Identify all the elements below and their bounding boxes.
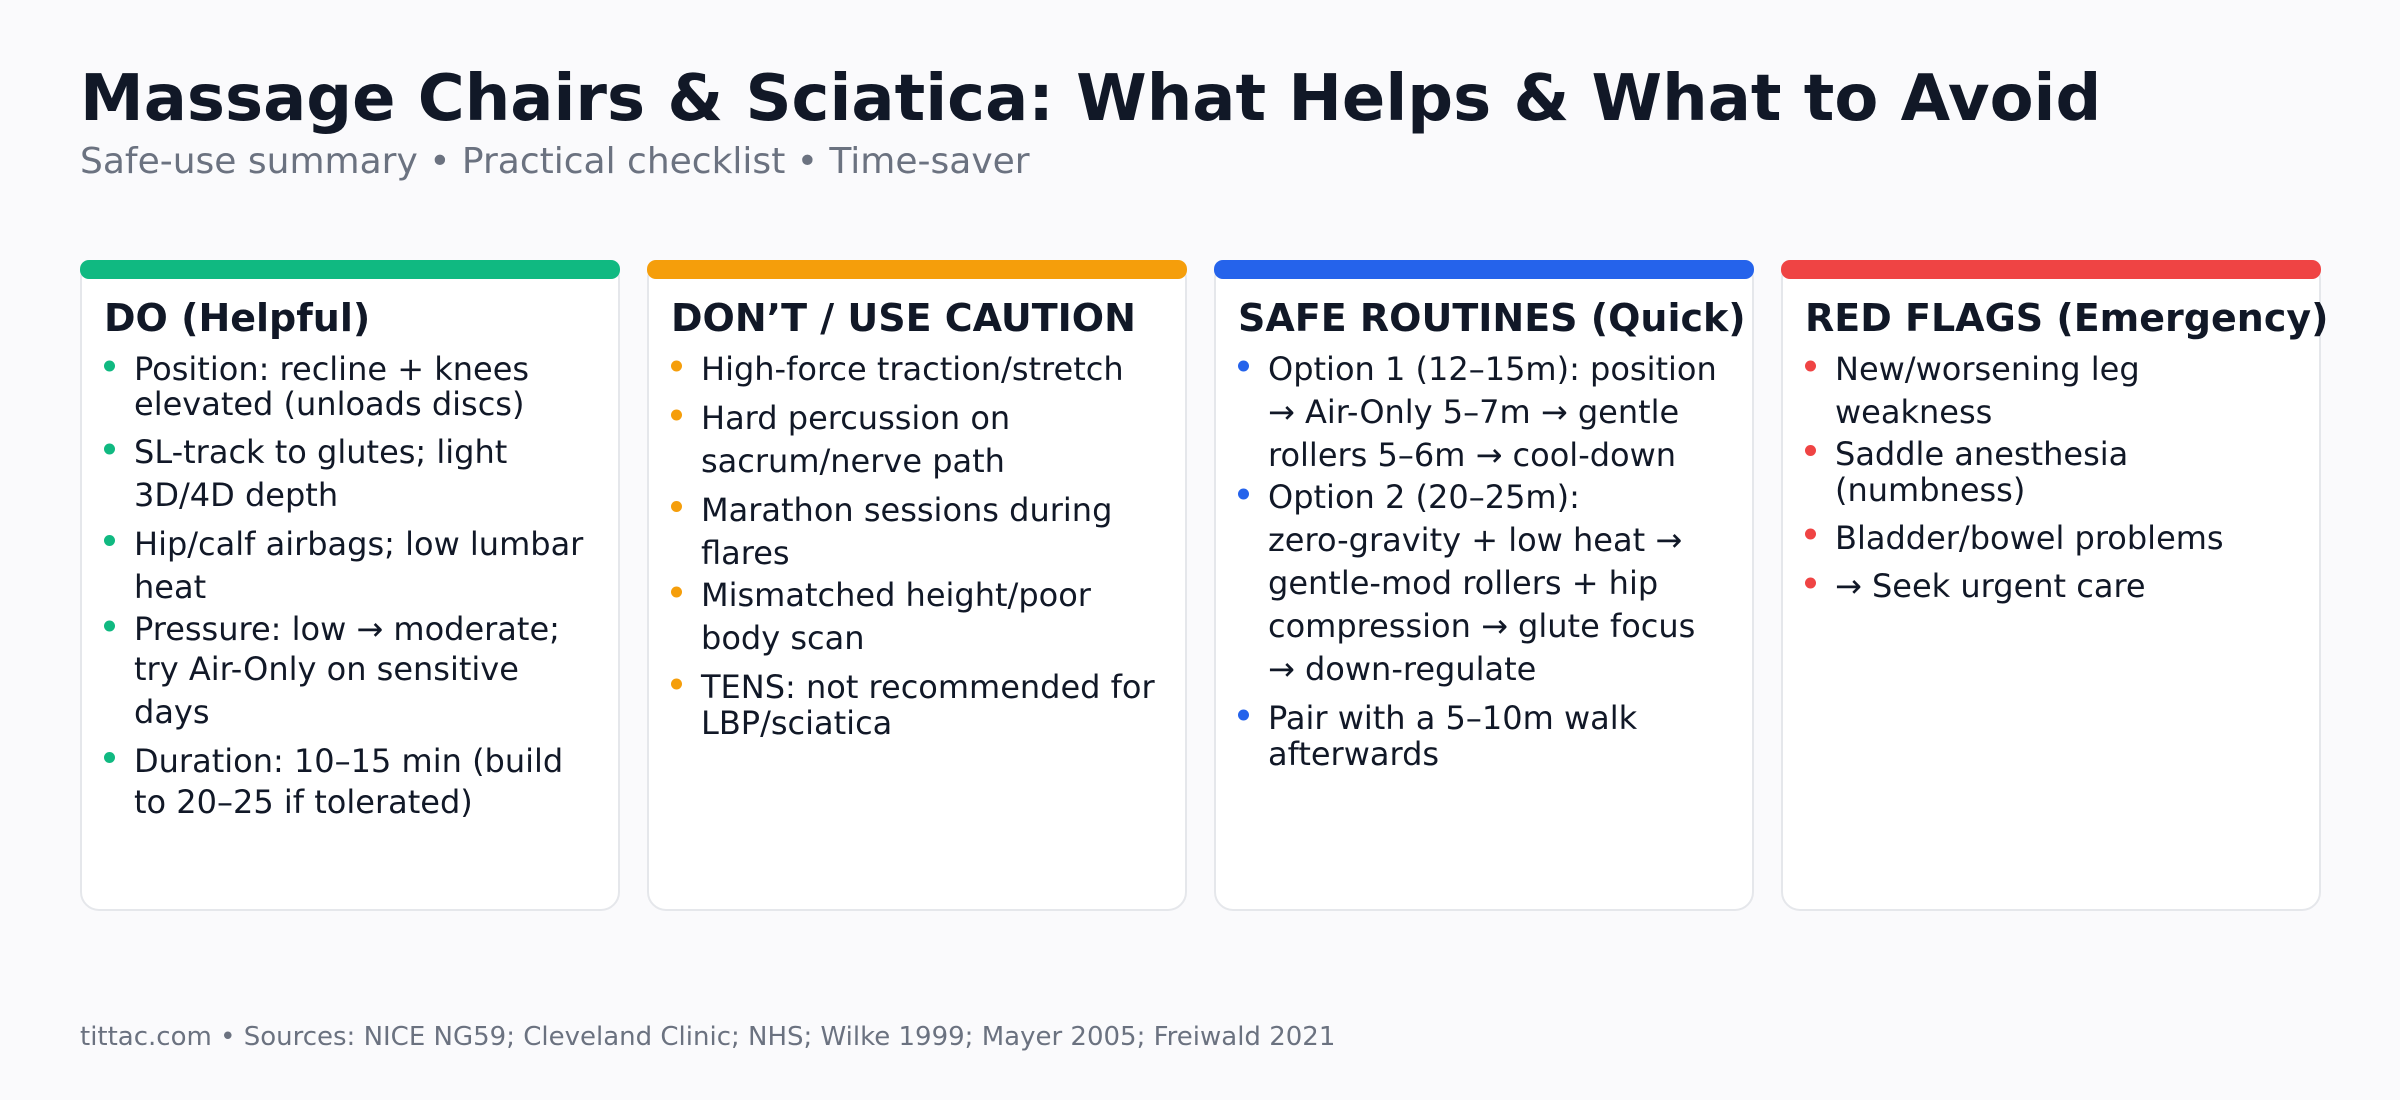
bullet list: safe routines: Option 1 (12–15m): position xyxy=(1268,350,1717,388)
subtitle: Safe-use summary • Practical checklist • Time-saver xyxy=(80,141,1030,182)
bullet list: safe routines: zero-gravity + low heat → xyxy=(1268,521,1682,559)
bullet list: safe routines: afterwards xyxy=(1268,735,1439,773)
bullet list: safe routines: Option 2 (20–25m): xyxy=(1268,478,1580,516)
bullet list: safe routines: Pair with a 5–10m walk xyxy=(1268,699,1638,737)
title: Massage Chairs & Sciatica: What Helps & What to Avoid xyxy=(80,62,2101,136)
panel: red flags (emergency) xyxy=(1781,260,2328,910)
bullet list: do: heat xyxy=(134,568,206,606)
bullet list: don't: LBP/sciatica xyxy=(701,704,892,742)
heading: do: DO (Helpful) xyxy=(104,296,370,340)
heading: red flags: RED FLAGS (Emergency) xyxy=(1805,296,2328,340)
bullet list: do: 3D/4D depth xyxy=(134,476,338,514)
bullet list: red flags: → Seek urgent care xyxy=(1835,567,2146,605)
bullet list: red flags: Saddle anesthesia xyxy=(1835,435,2128,473)
bullet list: do: days xyxy=(134,693,210,731)
bullet list: do: try Air-Only on sensitive xyxy=(134,650,519,688)
heading: safe routines: SAFE ROUTINES (Quick) xyxy=(1238,296,1746,340)
bullet list: safe routines: rollers 5–6m → cool-down xyxy=(1268,436,1676,474)
bullet list: don't: Marathon sessions during xyxy=(701,491,1112,529)
bullet list: red flags: (numbness) xyxy=(1835,471,2025,509)
bullet list: don't: flares xyxy=(701,534,790,572)
bullet list: red flags xyxy=(1805,350,2224,605)
bullet list: don't: sacrum/nerve path xyxy=(701,442,1005,480)
heading: don't: DON’T / USE CAUTION xyxy=(671,296,1136,340)
bullet list: do xyxy=(104,350,584,821)
bullet list: don't xyxy=(671,350,1156,742)
bullet list: don't: body scan xyxy=(701,619,864,657)
footer: sources: tittac.com • Sources: NICE NG59; Cleveland Clinic; NHS; Wilke 1999; Mayer 2005; Freiwald 2021 xyxy=(80,1022,1335,1052)
bullet list: do: elevated (unloads discs) xyxy=(134,385,524,423)
panel accent bar: red xyxy=(1781,260,2321,279)
panel accent bar: green xyxy=(80,260,620,279)
panel: safe routines (quick) xyxy=(1214,260,1754,910)
panel accent bar: blue xyxy=(1214,260,1754,279)
bullet list: don't: Mismatched height/poor xyxy=(701,576,1092,614)
bullet list: do: SL-track to glutes; light xyxy=(134,433,507,471)
bullet list: safe routines xyxy=(1238,350,1717,773)
bullet list: do: to 20–25 if tolerated) xyxy=(134,783,473,821)
panel: don't / use caution xyxy=(647,260,1187,910)
panel: do (helpful) xyxy=(80,260,620,910)
bullet list: safe routines: gentle-mod rollers + hip xyxy=(1268,564,1658,602)
bullet list: do: Duration: 10–15 min (build xyxy=(134,742,563,780)
bullet list: do: Hip/calf airbags; low lumbar xyxy=(134,525,584,563)
bullet list: don't: High-force traction/stretch xyxy=(701,350,1124,388)
bullet list: do: Position: recline + knees xyxy=(134,350,529,388)
panel accent bar: amber xyxy=(647,260,1187,279)
bullet list: safe routines: compression → glute focus xyxy=(1268,607,1695,645)
bullet list: safe routines: → Air-Only 5–7m → gentle xyxy=(1268,393,1679,431)
bullet list: red flags: weakness xyxy=(1835,393,1992,431)
bullet list: safe routines: → down-regulate xyxy=(1268,650,1536,688)
bullet list: don't: Hard percussion on xyxy=(701,399,1010,437)
bullet list: red flags: New/worsening leg xyxy=(1835,350,2140,388)
bullet list: don't: TENS: not recommended for xyxy=(700,668,1156,706)
bullet list: do: Pressure: low → moderate; xyxy=(134,610,560,648)
bullet list: red flags: Bladder/bowel problems xyxy=(1835,519,2224,557)
